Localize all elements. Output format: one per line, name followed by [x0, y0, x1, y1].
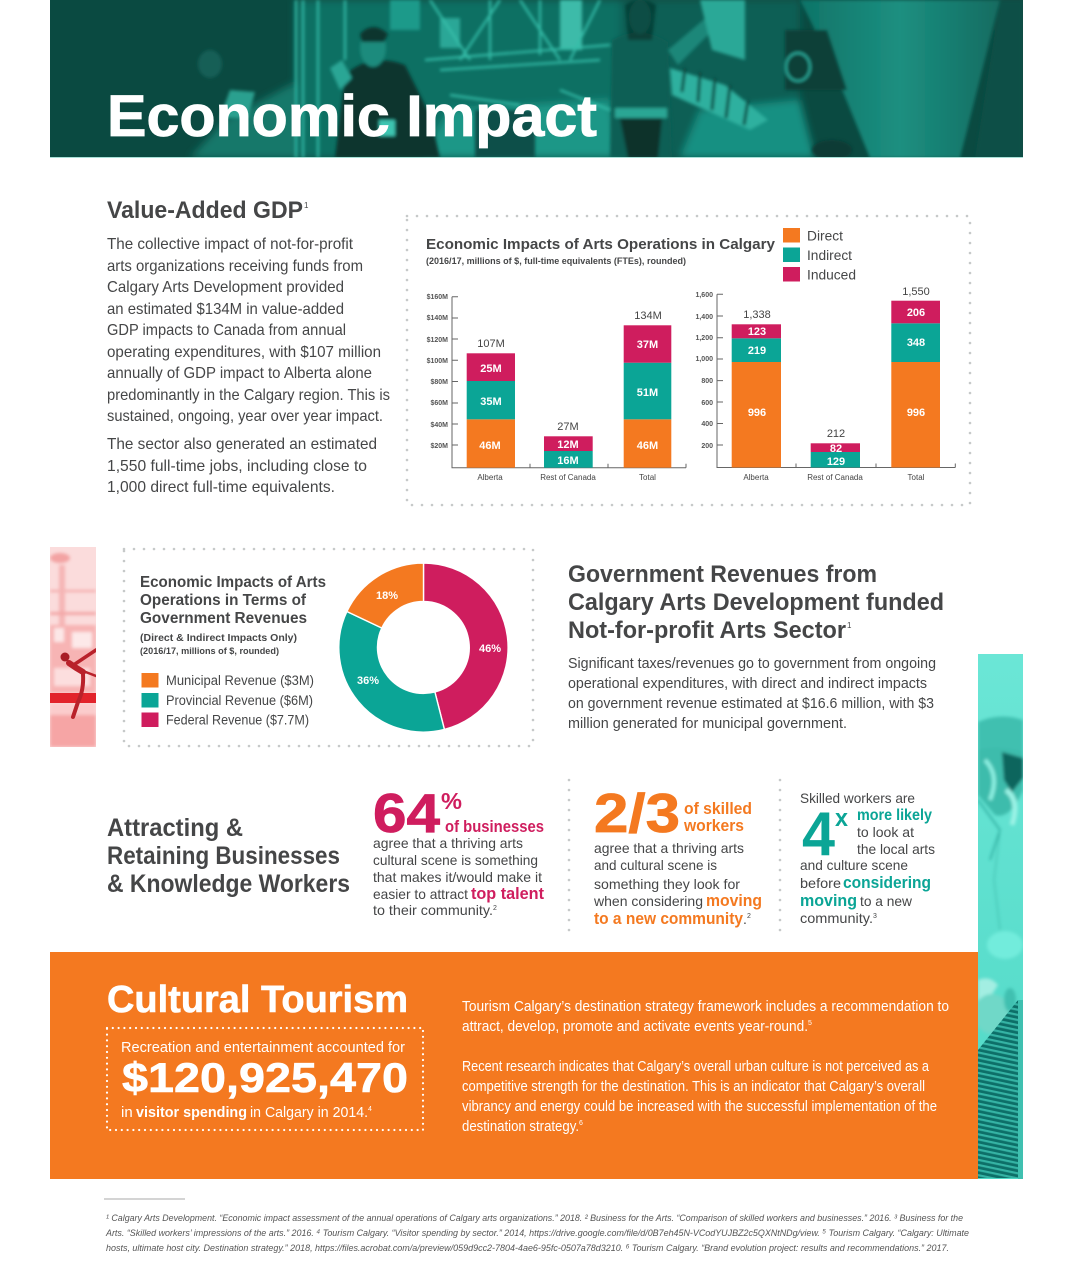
bar: Total GDP: 51M — [637, 387, 658, 399]
text block: value-added GDP description: sustained, ongoing, year over year impact. — [107, 408, 383, 425]
heading: government revenues: 1 — [847, 621, 852, 630]
legend — [783, 228, 856, 282]
text block: tourism strategy: Recent research indicates that Calgary’s overall urban culture is not perceived as a — [462, 1058, 930, 1075]
text block: tourism strategy: competitive strength for the destination. This is an indicator that Calgary’s overall — [462, 1078, 925, 1095]
donut chart: 46% — [479, 643, 501, 655]
bar: Alberta GDP: 107M — [477, 338, 505, 350]
callout: visitor spending: $120,925,470 — [122, 1054, 408, 1101]
bar: Alberta FTEs: 1,338 — [743, 309, 771, 321]
stat: two thirds of skilled workers: something they look for — [594, 876, 740, 892]
stat: two thirds of skilled workers: and cultural scene is — [594, 857, 717, 873]
bar chart: full-time equivalents — [695, 286, 955, 482]
text block: tourism strategy: 6 — [579, 1120, 583, 1127]
bar: Alberta FTEs: Alberta — [743, 473, 769, 482]
donut chart: 36% — [357, 675, 379, 687]
stat: 64 percent of businesses: easier to attract — [373, 886, 468, 902]
footnotes: hosts, ultimate host city. Destination strategy.” 2018, https://files.acrobat.com/a/preview/059d9cc2-7804-4ae6-95fc-0507a78d3210. ⁶ Tourism Calgary. “Brand evolution project: results and recommendations.” 2017. — [106, 1242, 949, 1253]
stat: 64 percent of businesses: agree that a thriving arts — [373, 835, 523, 851]
section: value-added GDP — [107, 197, 390, 496]
donut heading: Government Revenues — [140, 610, 307, 627]
bar: Total GDP: 46M — [637, 440, 658, 452]
bar: Alberta GDP — [467, 338, 515, 482]
stat: 64 percent of businesses: to their community. — [373, 902, 493, 918]
bar chart: GDP in millions of dollars: $40M — [430, 422, 448, 429]
stat: four times more likely: the local arts — [857, 841, 935, 857]
bar chart: GDP in millions of dollars: $80M — [430, 379, 448, 386]
bar chart: full-time equivalents: 1,000 — [695, 356, 713, 363]
stat: four times more likely: and culture scene — [800, 857, 908, 873]
text block: tourism strategy: destination strategy. — [462, 1118, 579, 1135]
donut chart — [339, 563, 508, 732]
donut legend: Municipal Revenue ($3M) — [166, 673, 314, 688]
bar: Rest of Canada GDP: 27M — [557, 421, 579, 433]
text block: value-added GDP description: an estimated $134M in value-added — [107, 301, 344, 318]
stat: two thirds of skilled workers: agree that a thriving arts — [594, 840, 744, 856]
stat: two thirds of skilled workers: 2/3 — [594, 782, 680, 844]
header banner — [50, 0, 1023, 160]
header photo: performers on a teal duotone stage — [50, 0, 1023, 160]
bar: Rest of Canada GDP: 12M — [557, 439, 579, 451]
bar: Rest of Canada FTEs — [807, 428, 863, 482]
bar: Total FTEs: Total — [908, 473, 925, 482]
bar: Rest of Canada GDP: Rest of Canada — [540, 473, 596, 482]
text block: government revenues description: operational expenditures, with direct and indirect impacts — [568, 675, 927, 692]
stat: two thirds of skilled workers: moving — [706, 892, 762, 910]
bar chart: full-time equivalents: 400 — [701, 421, 713, 428]
title: Economic Impact — [107, 84, 597, 149]
callout: visitor spending: Recreation and entertainment accounted for — [121, 1039, 405, 1056]
text block: tourism strategy: attract, develop, promote and activate events year-round. — [462, 1018, 808, 1035]
text block: value-added GDP description: 1,000 direct full-time equivalents. — [107, 479, 335, 496]
callout: visitor spending: in Calgary in 2014. — [250, 1104, 368, 1121]
chart title: Economic Impacts of Arts Operations in Calgary — [426, 236, 776, 253]
text block: value-added GDP description: The collective impact of not-for-profit — [107, 236, 354, 253]
bar: Rest of Canada FTEs: 212 — [827, 428, 845, 440]
text block: government revenues description: Significant taxes/revenues go to government from ongoing — [568, 655, 936, 672]
footnotes: ¹ Calgary Arts Development. “Economic impact assessment of the annual operations of Calgary arts organizations.” 2018. ² Business for the Arts. “Comparison of skilled workers and businesses.” 2016. ³ Business for the — [106, 1212, 963, 1223]
stat: four times more likely: before — [800, 875, 841, 891]
text block: value-added GDP description: The sector also generated an estimated — [107, 436, 377, 453]
text block: tourism strategy: Tourism Calgary’s destination strategy framework includes a recommendation to — [462, 998, 949, 1015]
text block: tourism strategy: vibrancy and energy could be increased with the successful implementation of the — [462, 1098, 937, 1115]
bar chart: full-time equivalents: 1,200 — [695, 335, 713, 342]
bar: Alberta FTEs: 996 — [748, 407, 766, 419]
stat: 64 percent of businesses: of businesses — [445, 818, 544, 836]
stat: 64 percent of businesses: top talent — [471, 885, 544, 903]
stat: four times more likely: moving — [800, 892, 857, 910]
bar: Total GDP: 37M — [637, 339, 658, 351]
donut subtitle: (Direct & Indirect Impacts Only) — [140, 632, 297, 644]
text block: tourism strategy: 5 — [808, 1020, 812, 1027]
stat: four times more likely: to a new — [860, 893, 913, 909]
panel: cultural tourism — [50, 952, 978, 1179]
heading: attracting and retaining: Retaining Businesses — [107, 842, 340, 870]
bar: Total GDP: Total — [639, 473, 656, 482]
stat: two thirds of skilled workers: workers — [683, 817, 744, 835]
legend: Induced — [807, 268, 856, 282]
text block: value-added GDP description: arts organizations receiving funds from — [107, 258, 363, 275]
panel: economic impacts of arts operations charts — [407, 216, 970, 505]
bar: Total FTEs: 996 — [907, 407, 925, 419]
stat: 64 percent of businesses: cultural scene is something — [373, 852, 538, 868]
stat: two thirds of skilled workers: . — [743, 911, 747, 927]
donut heading: Economic Impacts of Arts — [140, 574, 326, 591]
stat: 64 percent of businesses: % — [441, 788, 462, 814]
bar: Total FTEs: 348 — [907, 337, 925, 349]
donut chart: 18% — [376, 590, 398, 602]
bar chart: full-time equivalents: 200 — [701, 443, 713, 450]
stat: four times more likely: Skilled workers are — [800, 790, 915, 806]
footnotes: Arts. “Skilled workers’ impressions of the arts.” 2016. ⁴ Tourism Calgary. “Visitor spending by sector.” 2014, https://drive.google.com/file/d/0B7eh45N-VCodYUJBZ2c5QXNtNDg/view. ⁵ Tourism Calgary. “Calgary: Ultimate — [105, 1227, 969, 1238]
bar chart: GDP in millions of dollars: $120M — [427, 337, 448, 344]
legend: Direct — [807, 228, 843, 244]
heading: attracting and retaining — [107, 814, 350, 898]
bar chart: full-time equivalents: 1,400 — [695, 314, 713, 321]
bar: Total FTEs — [891, 286, 940, 482]
stat: four times more likely: more likely — [857, 807, 932, 824]
stat: two thirds of skilled workers: to a new community — [594, 910, 744, 928]
bar: Alberta GDP: 35M — [480, 396, 502, 408]
stat: 64 percent of businesses: 2 — [493, 905, 497, 912]
heading: government revenues: Calgary Arts Development funded — [568, 589, 944, 616]
donut legend: Federal Revenue ($7.7M) — [166, 712, 309, 728]
bar: Rest of Canada FTEs: 129 — [827, 456, 845, 468]
stat: two thirds of skilled workers: of skilled — [684, 800, 752, 818]
bar: Rest of Canada FTEs: 82 — [830, 443, 842, 455]
bar chart: GDP in millions of dollars: $20M — [430, 443, 448, 450]
stat: 64 percent of businesses: 64 — [373, 782, 440, 844]
bar: Total FTEs: 1,550 — [902, 286, 930, 298]
donut heading: Operations in Terms of — [140, 592, 307, 609]
text block: government revenues description: on government revenue estimated at $16.6 million, with $3 — [568, 695, 934, 712]
text block: value-added GDP description: Calgary Arts Development provided — [107, 279, 344, 296]
stat: four times more likely: 3 — [873, 913, 877, 920]
text block: tourism strategy — [462, 998, 949, 1135]
donut heading — [140, 574, 326, 627]
donut subtitle: (2016/17, millions of $, rounded) — [140, 646, 279, 657]
stat: two thirds of skilled workers — [569, 780, 762, 935]
bar chart: full-time equivalents: 600 — [701, 400, 713, 407]
bar: Rest of Canada GDP: 16M — [557, 455, 579, 467]
stat: four times more likely: 4 — [802, 800, 835, 869]
text block: value-added GDP description: annually of GDP impact to Alberta alone — [107, 365, 372, 382]
bar chart: full-time equivalents: 1,600 — [695, 292, 713, 299]
image: dancer in red duotone — [50, 547, 96, 747]
stat: two thirds of skilled workers: 2 — [747, 913, 751, 920]
callout: visitor spending: in — [121, 1104, 133, 1121]
legend: Indirect — [807, 248, 852, 263]
text block: value-added GDP description: GDP impacts to Canada from annual — [107, 322, 346, 339]
heading: value-added GDP: Value-Added GDP — [107, 197, 303, 224]
bar: Alberta FTEs: 123 — [748, 326, 766, 338]
stat: 64 percent of businesses — [373, 782, 544, 918]
bar: Alberta FTEs — [732, 309, 781, 482]
bar: Alberta GDP: Alberta — [477, 473, 503, 482]
bar: Alberta GDP: 46M — [479, 440, 501, 452]
bar chart: GDP in millions of dollars: $160M — [427, 294, 448, 301]
heading: attracting and retaining: & Knowledge Workers — [107, 870, 350, 898]
donut legend — [142, 673, 314, 728]
stat: two thirds of skilled workers: when considering — [593, 893, 703, 909]
heading: attracting and retaining: Attracting & — [107, 814, 243, 842]
bar: Rest of Canada FTEs: Rest of Canada — [807, 473, 863, 482]
heading: government revenues — [568, 561, 944, 644]
footnotes — [104, 1198, 969, 1253]
stat: 64 percent of businesses: that makes it/would make it — [373, 869, 542, 885]
bar: Rest of Canada GDP — [540, 421, 596, 482]
text block: value-added GDP description: operating expenditures, with $107 million — [107, 344, 381, 361]
text block: value-added GDP description — [107, 236, 390, 496]
donut subtitle — [140, 632, 297, 657]
section: government revenues text — [568, 561, 944, 732]
callout: visitor spending: 4 — [368, 1106, 372, 1113]
bar: Alberta GDP: 25M — [480, 363, 502, 375]
stat: four times more likely: community. — [800, 910, 873, 926]
stat: four times more likely: to look at — [857, 824, 914, 840]
bar: Total FTEs: 206 — [907, 307, 925, 319]
bar: Total GDP — [624, 310, 671, 482]
stat: four times more likely: x — [835, 805, 849, 832]
bar chart: GDP in millions of dollars: $60M — [430, 400, 448, 407]
stat: four times more likely — [780, 780, 935, 935]
heading: value-added GDP: 1 — [304, 201, 309, 210]
panel: government revenues donut — [124, 549, 533, 746]
callout: visitor spending: visitor spending — [136, 1104, 247, 1121]
text block: government revenues description — [568, 655, 936, 732]
bar: Total GDP: 134M — [634, 310, 662, 322]
text block: value-added GDP description: predominantly in the Calgary region. This is — [107, 387, 390, 404]
heading: government revenues: Government Revenues from — [568, 561, 877, 588]
bar chart: full-time equivalents: 800 — [701, 378, 713, 385]
bar chart: GDP in millions of dollars: $140M — [427, 315, 448, 322]
bar: Alberta FTEs: 219 — [748, 345, 766, 357]
bar chart: GDP in millions of dollars — [427, 294, 686, 482]
text block: value-added GDP description: 1,550 full-time jobs, including close to — [107, 458, 367, 475]
image: teal painted strip — [974, 654, 1023, 1179]
callout: visitor spending — [107, 1028, 423, 1130]
bar chart: GDP in millions of dollars: $100M — [427, 358, 448, 365]
donut legend: Provincial Revenue ($6M) — [166, 693, 313, 708]
heading: cultural tourism: Cultural Tourism — [107, 979, 408, 1021]
chart subtitle: (2016/17, millions of $, full-time equivalents (FTEs), rounded) — [426, 256, 686, 266]
heading: government revenues: Not-for-profit Arts Sector — [568, 617, 846, 644]
text block: government revenues description: million generated for municipal government. — [568, 715, 847, 732]
stat: four times more likely: considering — [843, 874, 931, 892]
